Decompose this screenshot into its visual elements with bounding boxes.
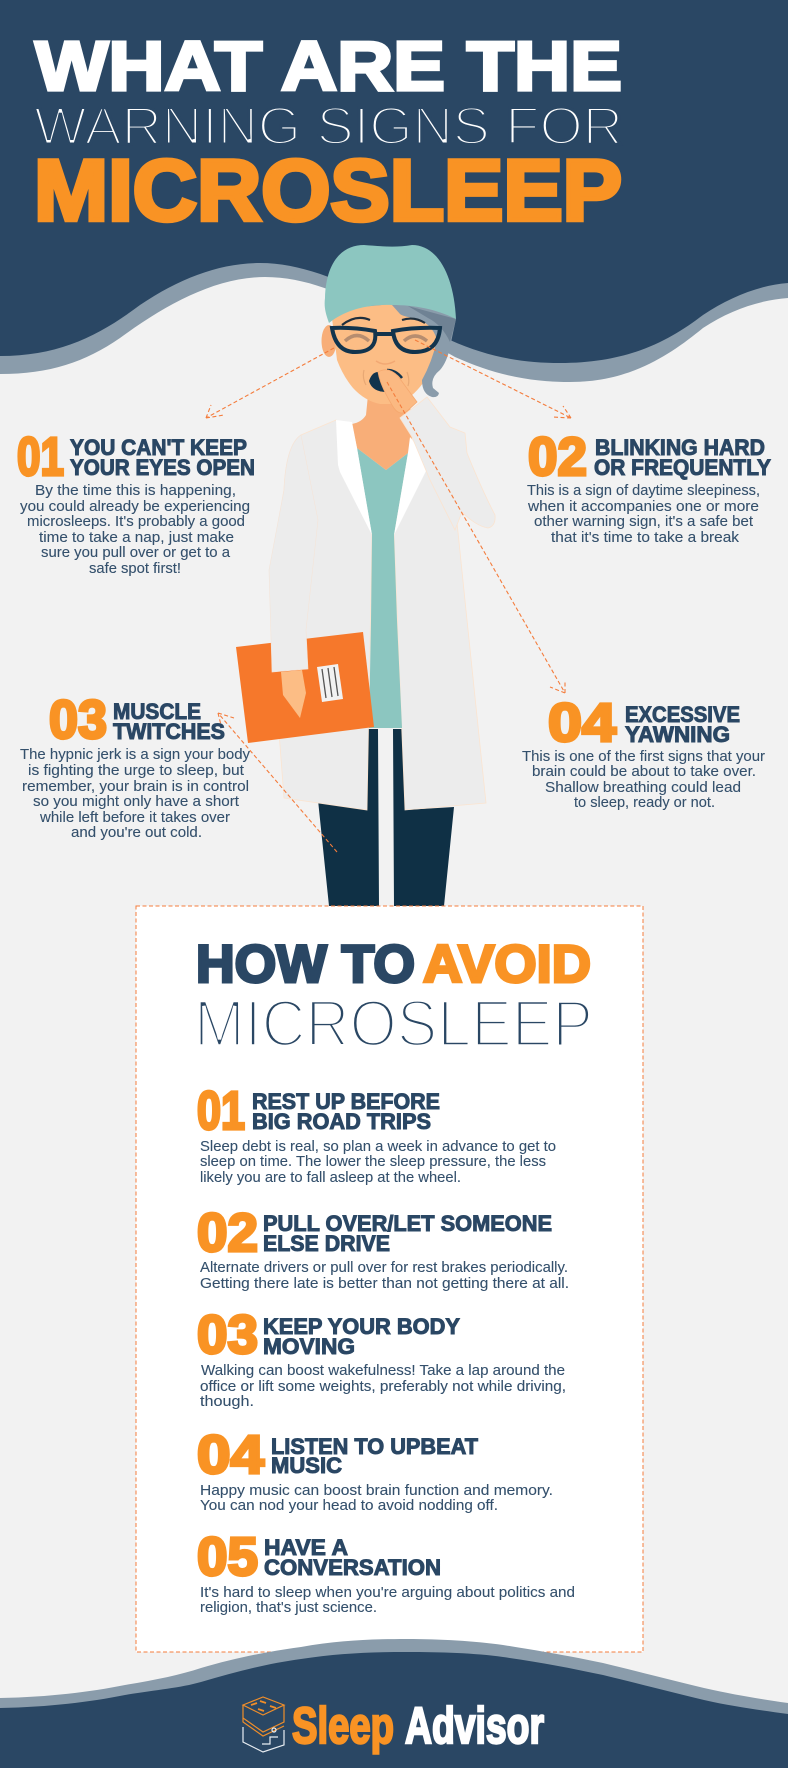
number 01: 01: [17, 427, 64, 487]
body text: time to take a nap, just make: [39, 529, 234, 546]
heading: [625, 702, 740, 747]
tip 04: 04: [197, 1425, 264, 1485]
tip 02: [197, 1203, 569, 1292]
sign 02: [527, 427, 771, 546]
neck: [352, 395, 412, 470]
arrow: to sign 01: [206, 348, 334, 418]
panel: how to avoid microsleep: [136, 906, 643, 1652]
tip 05: 05: [197, 1527, 258, 1587]
body text: so you might only have a short: [33, 793, 240, 810]
heading: OR FREQUENTLY: [594, 455, 771, 480]
body text: safe spot first!: [89, 560, 181, 577]
tip 05: [197, 1527, 575, 1616]
tip 01: BIG ROAD TRIPS: [252, 1109, 431, 1134]
tip 02: 02: [197, 1203, 258, 1263]
tip 01: REST UP BEFORE: [252, 1089, 440, 1114]
tip 03: [197, 1305, 566, 1410]
heading: EXCESSIVE: [625, 702, 740, 727]
heading: TWITCHES: [113, 719, 225, 744]
logo icon: mattress box: [243, 1697, 284, 1752]
tip 01: [197, 1081, 556, 1186]
heading: BLINKING HARD: [595, 435, 765, 460]
body text: other warning sign, it's a safe bet: [534, 513, 754, 530]
trousers: [318, 729, 454, 906]
panel heading: HOW TO: [196, 935, 415, 994]
orange folder: [236, 632, 374, 743]
heading: [70, 435, 255, 480]
logo: [243, 1697, 544, 1754]
body text: [20, 746, 250, 841]
body text: you could already be experiencing: [20, 498, 250, 515]
tip 03: KEEP YOUR BODY: [263, 1314, 460, 1339]
tip 03: Walking can boost wakefulness! Take a lap around the: [201, 1363, 565, 1379]
tip 02: PULL OVER/LET SOMEONE: [263, 1211, 552, 1236]
body text: By the time this is happening,: [35, 482, 236, 499]
panel heading: [194, 935, 593, 1060]
panel heading: MICROSLEEP: [194, 986, 593, 1060]
body text: The hypnic jerk is a sign your body: [20, 746, 250, 763]
heading: YOU CAN'T KEEP: [70, 435, 247, 460]
body text: when it accompanies one or more: [527, 498, 759, 515]
header wave background: [0, 0, 788, 382]
sign 01: [17, 427, 255, 577]
body text: Shallow breathing could lead: [545, 779, 741, 796]
number 03: 03: [49, 690, 107, 750]
title: WARNING SIGNS FOR: [34, 97, 623, 156]
panel heading: AVOID: [423, 935, 591, 994]
lapels: [336, 420, 430, 535]
raised sleeve: [400, 397, 495, 530]
body text: [20, 482, 250, 577]
logo wordmark: Sleep: [292, 1697, 394, 1754]
sign 04: [522, 693, 765, 811]
logo wordmark: Advisor: [405, 1697, 544, 1754]
body text: that it's time to take a break: [551, 529, 740, 546]
tip 03: office or lift some weights, preferably not while driving,: [200, 1379, 566, 1395]
tip 04: Happy music can boost brain function and memory.: [200, 1483, 553, 1499]
tip 04: You can nod your head to avoid nodding off.: [200, 1498, 498, 1514]
title: [34, 27, 623, 239]
heading: YAWNING: [625, 722, 730, 747]
arrow: to sign 02: [415, 340, 571, 418]
heading: [113, 699, 225, 744]
tip 05: It's hard to sleep when you're arguing about politics and: [200, 1585, 575, 1601]
arrow: to sign 03: [218, 713, 337, 852]
title: WHAT ARE THE: [35, 27, 622, 105]
left sleeve: [269, 435, 318, 672]
body text: while left before it takes over: [39, 809, 230, 826]
tip 04: [197, 1425, 553, 1514]
body text: This is a sign of daytime sleepiness,: [527, 482, 760, 499]
tip 02: Alternate drivers or pull over for rest brakes periodically.: [200, 1260, 568, 1276]
tip 02: ELSE DRIVE: [263, 1231, 390, 1256]
number 02: 02: [528, 427, 587, 487]
tip 01: 01: [197, 1081, 245, 1141]
left hand: [281, 670, 306, 718]
heading: [594, 435, 771, 480]
footer wave: [0, 1639, 788, 1768]
title: MICROSLEEP: [34, 143, 622, 239]
body text: [527, 482, 760, 546]
body text: remember, your brain is in control: [22, 778, 249, 795]
tip 05: HAVE A: [264, 1535, 348, 1560]
body text: to sleep, ready or not.: [574, 794, 715, 811]
head: [322, 245, 456, 413]
illustration: yawning doctor: [236, 245, 495, 906]
tip 04: MUSIC: [271, 1453, 342, 1478]
tip 01: likely you are to fall asleep at the wheel.: [200, 1170, 461, 1186]
body text: This is one of the first signs that your: [522, 748, 765, 765]
sign 03: [20, 690, 250, 841]
tip 03: 03: [197, 1305, 258, 1365]
tip 02: Getting there late is better than not getting there at all.: [200, 1276, 569, 1292]
folder label: [317, 664, 343, 702]
tip 04: LISTEN TO UPBEAT: [271, 1434, 478, 1459]
heading: YOUR EYES OPEN: [70, 455, 255, 480]
tip 05: CONVERSATION: [264, 1555, 441, 1580]
heading: MUSCLE: [113, 699, 201, 724]
number 04: 04: [548, 693, 616, 753]
lab coat: [270, 420, 486, 810]
arrow: to sign 04: [387, 382, 565, 693]
tip 03: MOVING: [263, 1334, 355, 1359]
tip 01: Sleep debt is real, so plan a week in advance to get to: [200, 1139, 556, 1155]
tip 01: sleep on time. The lower the sleep pressure, the less: [200, 1154, 546, 1170]
body text: [522, 748, 765, 811]
body text: is fighting the urge to sleep, but: [28, 762, 245, 779]
tip 05: religion, that's just science.: [200, 1600, 377, 1616]
body text: and you're out cold.: [71, 824, 202, 841]
body text: brain could be about to take over.: [532, 763, 756, 780]
tip 03: though.: [200, 1394, 254, 1410]
body text: sure you pull over or get to a: [41, 544, 231, 561]
body text: microsleeps. It's probably a good: [27, 513, 245, 530]
scrubs: [357, 448, 408, 728]
logo wordmark: [292, 1697, 544, 1754]
